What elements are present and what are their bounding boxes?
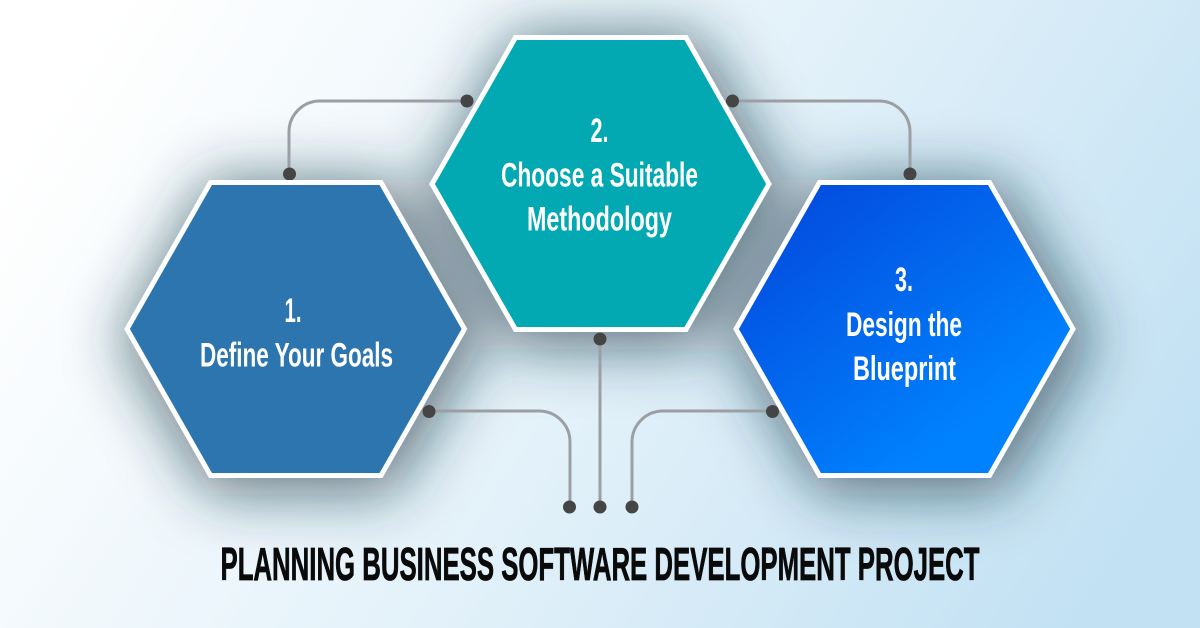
label: Design the: Design the — [846, 306, 962, 344]
label: Define Your Goals: Define Your Goals — [200, 336, 393, 374]
hexagon shadows — [120, 35, 1094, 494]
hexagon 1: Define Your Goals — [127, 182, 464, 476]
connector: hexagon 3 to base — [632, 411, 772, 507]
connector: hexagon 2 to hexagon 1 — [289, 101, 467, 173]
connector dots — [283, 94, 916, 514]
label: Methodology: Methodology — [527, 200, 672, 238]
connector: hexagon 1 to base — [429, 411, 570, 507]
number 3: 3. — [895, 261, 913, 299]
hexagon 3: Design the Blueprint — [736, 182, 1073, 476]
label: Choose a Suitable: Choose a Suitable — [501, 156, 698, 194]
connector: hexagon 2 to hexagon 3 — [732, 101, 910, 173]
label: Blueprint: Blueprint — [853, 350, 956, 388]
number 2: 2. — [590, 112, 608, 150]
connector: hexagon 2 to base — [598, 339, 602, 507]
hexagon 2: Choose a Suitable Methodology — [432, 38, 769, 330]
number 1: 1. — [284, 292, 302, 330]
